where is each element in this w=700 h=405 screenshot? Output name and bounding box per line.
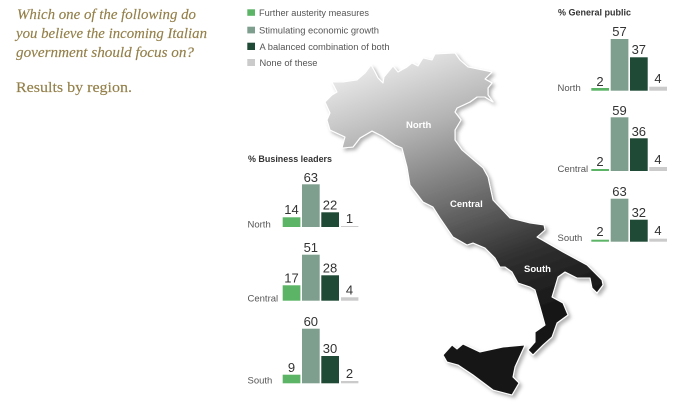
heading: business leaders: % Business leaders	[248, 154, 332, 164]
Sicily	[443, 344, 525, 395]
map label: South: South	[524, 264, 551, 275]
bar chart: general public south: 32	[632, 205, 646, 220]
bar chart: business leaders north	[248, 170, 358, 230]
bar chart: general public north: North	[558, 83, 581, 94]
legend: Further austerity measures	[259, 8, 370, 18]
map label: Central: Central	[450, 199, 483, 210]
bar chart: general public central: Central	[558, 164, 588, 175]
bar chart: business leaders south: 60	[304, 314, 318, 329]
bar chart: general public south: 4	[654, 223, 662, 238]
bar chart: general public north	[558, 24, 667, 94]
legend: A balanced combination of both	[260, 42, 390, 52]
bar chart: business leaders central: 51	[304, 240, 318, 255]
bar chart: business leaders south: 2	[346, 366, 353, 381]
panel: business leaders	[248, 154, 358, 386]
bar chart: business leaders south: South	[248, 376, 272, 386]
legend: Stimulating economic growth	[259, 26, 379, 36]
bar chart: general public north: 4	[654, 71, 662, 86]
title	[14, 7, 207, 61]
bar chart: business leaders central: 17	[284, 270, 299, 286]
bar chart: business leaders south: 30	[323, 341, 337, 356]
bar chart: business leaders north: 22	[323, 198, 337, 212]
subtitle: Results by region.	[16, 80, 132, 96]
bar chart: business leaders central	[248, 240, 358, 304]
bar chart: general public north: 37	[632, 42, 646, 57]
bar chart: business leaders central: 4	[346, 282, 353, 298]
legend: None of these	[260, 58, 318, 68]
panel: general public	[558, 8, 667, 244]
bar chart: business leaders north: North	[248, 220, 271, 230]
title: Which one of the following do	[17, 7, 196, 23]
bar chart: general public central	[558, 103, 667, 175]
bar chart: business leaders south: 9	[288, 360, 295, 375]
bar chart: general public central: 59	[612, 103, 627, 118]
bar chart: general public north: 57	[612, 24, 627, 39]
heading: general public: % General public	[558, 8, 631, 18]
bar chart: business leaders north: 63	[304, 170, 318, 185]
bar chart: general public central: 36	[632, 124, 646, 139]
mainland	[325, 53, 603, 355]
bar chart: general public central: 4	[654, 152, 662, 167]
bar chart: business leaders central: Central	[248, 294, 278, 304]
bar chart: business leaders south	[248, 314, 358, 386]
bar chart: business leaders north: 14	[284, 202, 299, 217]
title: you believe the incoming Italian	[14, 26, 207, 42]
bar chart: general public central: 2	[596, 154, 604, 169]
legend	[247, 8, 390, 68]
bar chart: business leaders north: 1	[346, 211, 353, 226]
bar chart: general public south: South	[558, 233, 582, 244]
bar chart: general public south	[558, 184, 667, 244]
bar chart: general public north: 2	[596, 74, 604, 89]
bar chart: general public south: 2	[596, 224, 604, 239]
bar chart: business leaders central: 28	[323, 260, 337, 276]
map of Italy	[325, 53, 603, 395]
bar chart: general public south: 63	[612, 184, 627, 199]
title: government should focus on?	[16, 45, 194, 61]
map label: North: North	[406, 120, 432, 131]
